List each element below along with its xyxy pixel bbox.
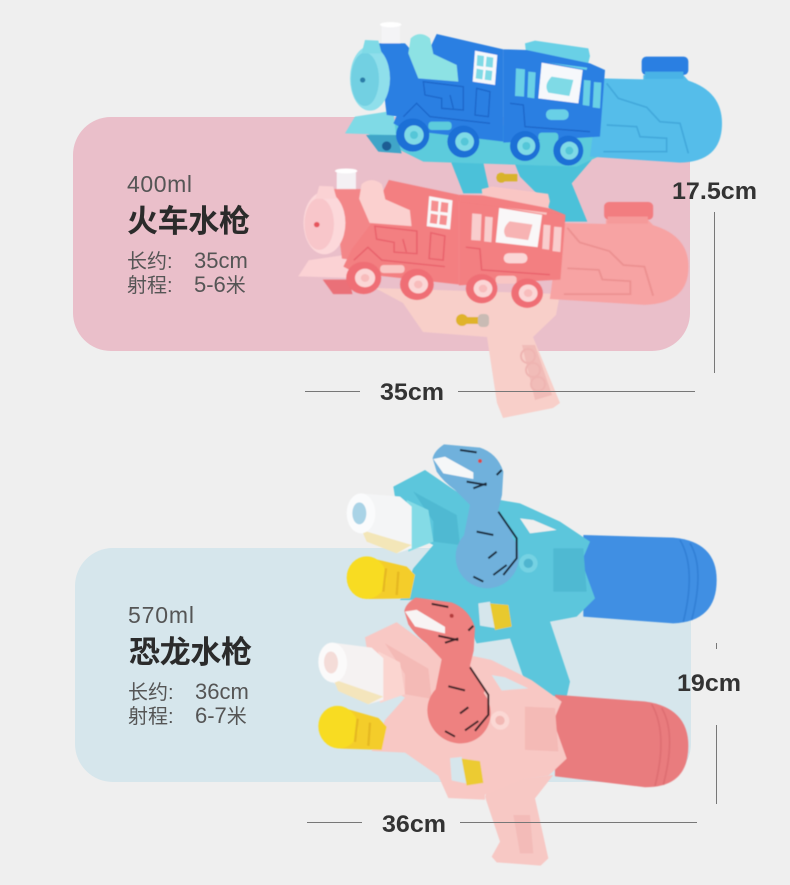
title: 火车水枪: [127, 204, 250, 239]
dimension: dinosaur gun length 36cm: 36cm: [382, 811, 446, 838]
length spec: 长约:: [127, 251, 173, 273]
train gun specs text: [127, 171, 250, 297]
blue dinosaur water gun: [347, 444, 717, 697]
pink dinosaur water gun grip: [485, 775, 553, 866]
range spec: 射程:: [128, 706, 174, 728]
dimension: train gun height 17.5cm: 17.5cm: [672, 178, 757, 205]
dinosaur gun specs text: [128, 602, 252, 728]
range spec: 6-7: [195, 703, 227, 728]
pink train water gun: [298, 168, 688, 308]
panel: dinosaur water gun background: [75, 548, 691, 782]
length spec: 36cm: [195, 679, 249, 704]
capacity: 400ml: [127, 171, 192, 197]
dimension: dinosaur gun height 19cm: 19cm: [677, 670, 741, 697]
capacity: 570ml: [128, 602, 194, 628]
range spec: 米: [226, 275, 246, 297]
blue train water gun: [345, 22, 722, 222]
length spec: 长约:: [128, 682, 174, 704]
length spec: 35cm: [194, 248, 248, 273]
pink dinosaur water gun: [318, 593, 688, 809]
pink train water gun grip: [375, 288, 560, 418]
dimension: train gun length 35cm: 35cm: [380, 379, 444, 406]
range spec: 米: [227, 706, 247, 728]
range spec: 5-6: [194, 272, 226, 297]
range spec: 射程:: [127, 275, 173, 297]
title: 恐龙水枪: [129, 635, 252, 670]
panel: train water gun background: [73, 117, 690, 351]
